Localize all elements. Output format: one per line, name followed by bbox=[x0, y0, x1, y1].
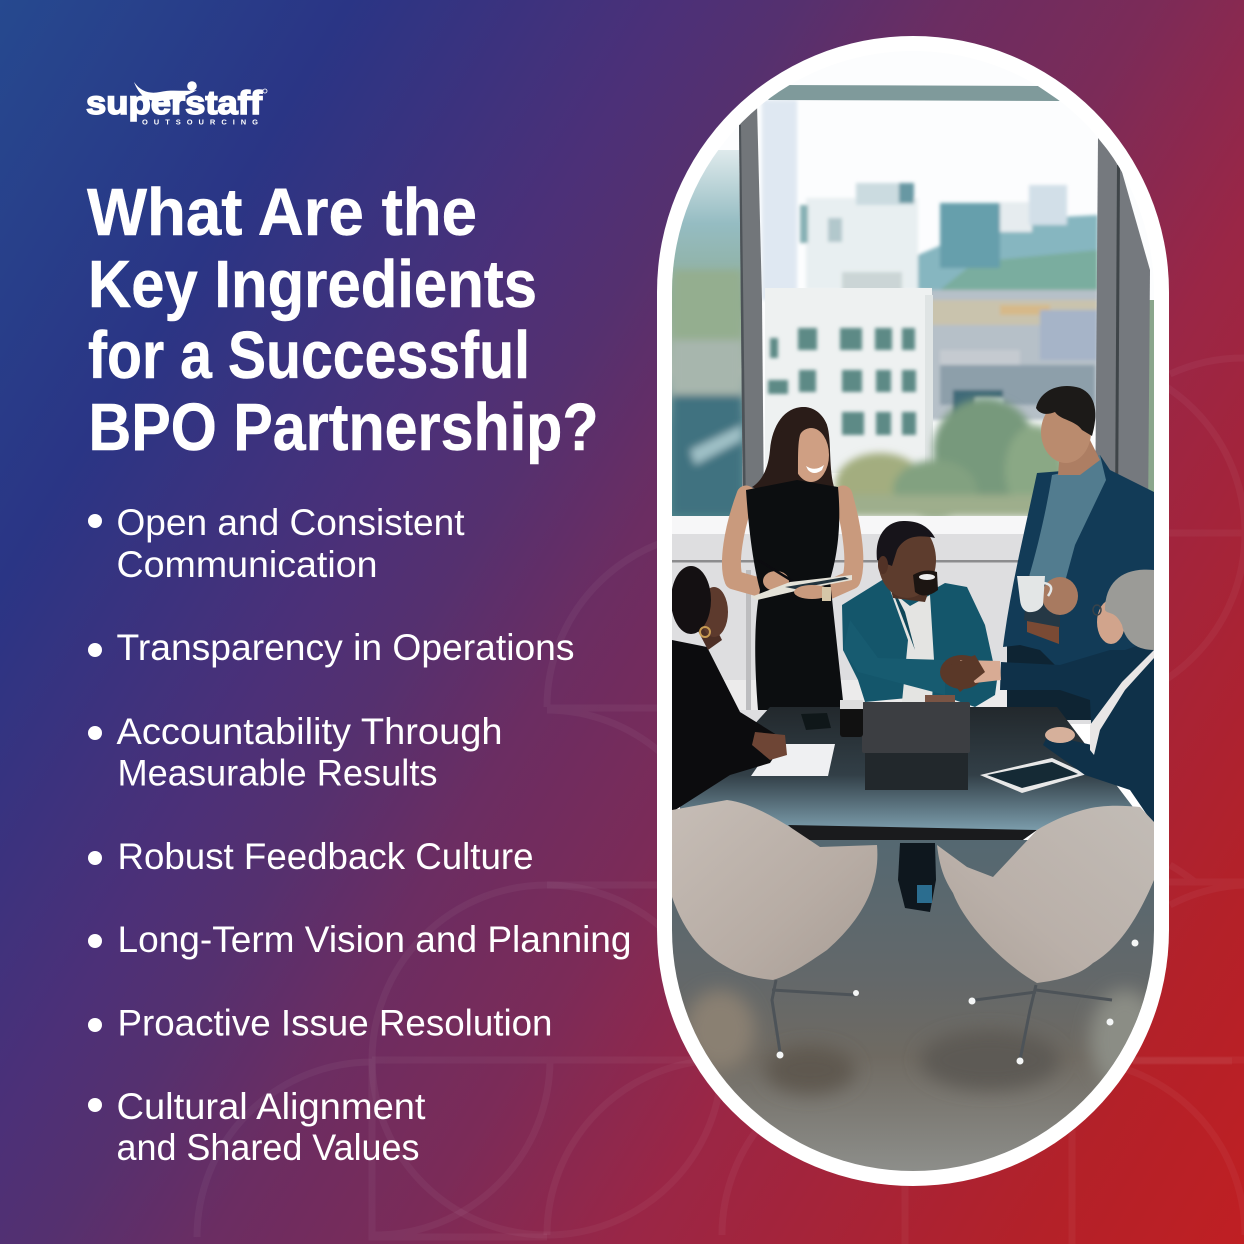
white chairs bbox=[672, 800, 1154, 1064]
seated woman right bbox=[943, 570, 1154, 825]
item: transparency: Transparency in Operations bbox=[116, 627, 574, 668]
title bbox=[87, 175, 598, 465]
title: BPO Partnership? bbox=[88, 390, 598, 465]
window frame bbox=[739, 85, 1150, 520]
title: Key Ingredients bbox=[88, 247, 537, 322]
title: What Are the bbox=[87, 175, 477, 250]
paper bbox=[751, 744, 835, 776]
bullet list bbox=[88, 502, 632, 1168]
item: communication: Communication bbox=[116, 544, 378, 585]
title: for a Successful bbox=[88, 318, 530, 393]
window view bbox=[672, 100, 1154, 516]
floor bbox=[672, 840, 1160, 1171]
standing woman bbox=[731, 407, 854, 710]
pill photo frame bbox=[657, 36, 1169, 1186]
tablet bbox=[980, 758, 1087, 793]
item: cultural alignment: and Shared Values bbox=[116, 1127, 420, 1168]
table bbox=[680, 707, 1136, 847]
logo: SuperStaff Outsourcing: superstaff bbox=[86, 84, 263, 121]
seated woman left bbox=[671, 566, 787, 812]
item: cultural alignment: Cultural Alignment bbox=[116, 1086, 426, 1127]
item: issue resolution: Proactive Issue Resolution bbox=[118, 1002, 552, 1044]
photo: team meeting in office bbox=[671, 51, 1160, 1171]
wall and sill bbox=[672, 516, 1091, 724]
item: communication bbox=[88, 502, 465, 585]
item: accountability: Accountability Through bbox=[116, 711, 502, 752]
item: long-term vision: Long-Term Vision and Planning bbox=[118, 919, 632, 960]
seated man bbox=[842, 521, 997, 707]
logo: SuperStaff Outsourcing: OUTSOURCING bbox=[142, 118, 258, 126]
item: communication: Open and Consistent bbox=[116, 502, 465, 543]
item: accountability bbox=[88, 711, 502, 794]
laptop, cup and phone bbox=[801, 700, 970, 753]
item: feedback: Robust Feedback Culture bbox=[118, 836, 534, 877]
item: accountability: Measurable Results bbox=[118, 752, 438, 794]
item: cultural alignment bbox=[88, 1086, 426, 1168]
standing man bbox=[1003, 386, 1154, 720]
